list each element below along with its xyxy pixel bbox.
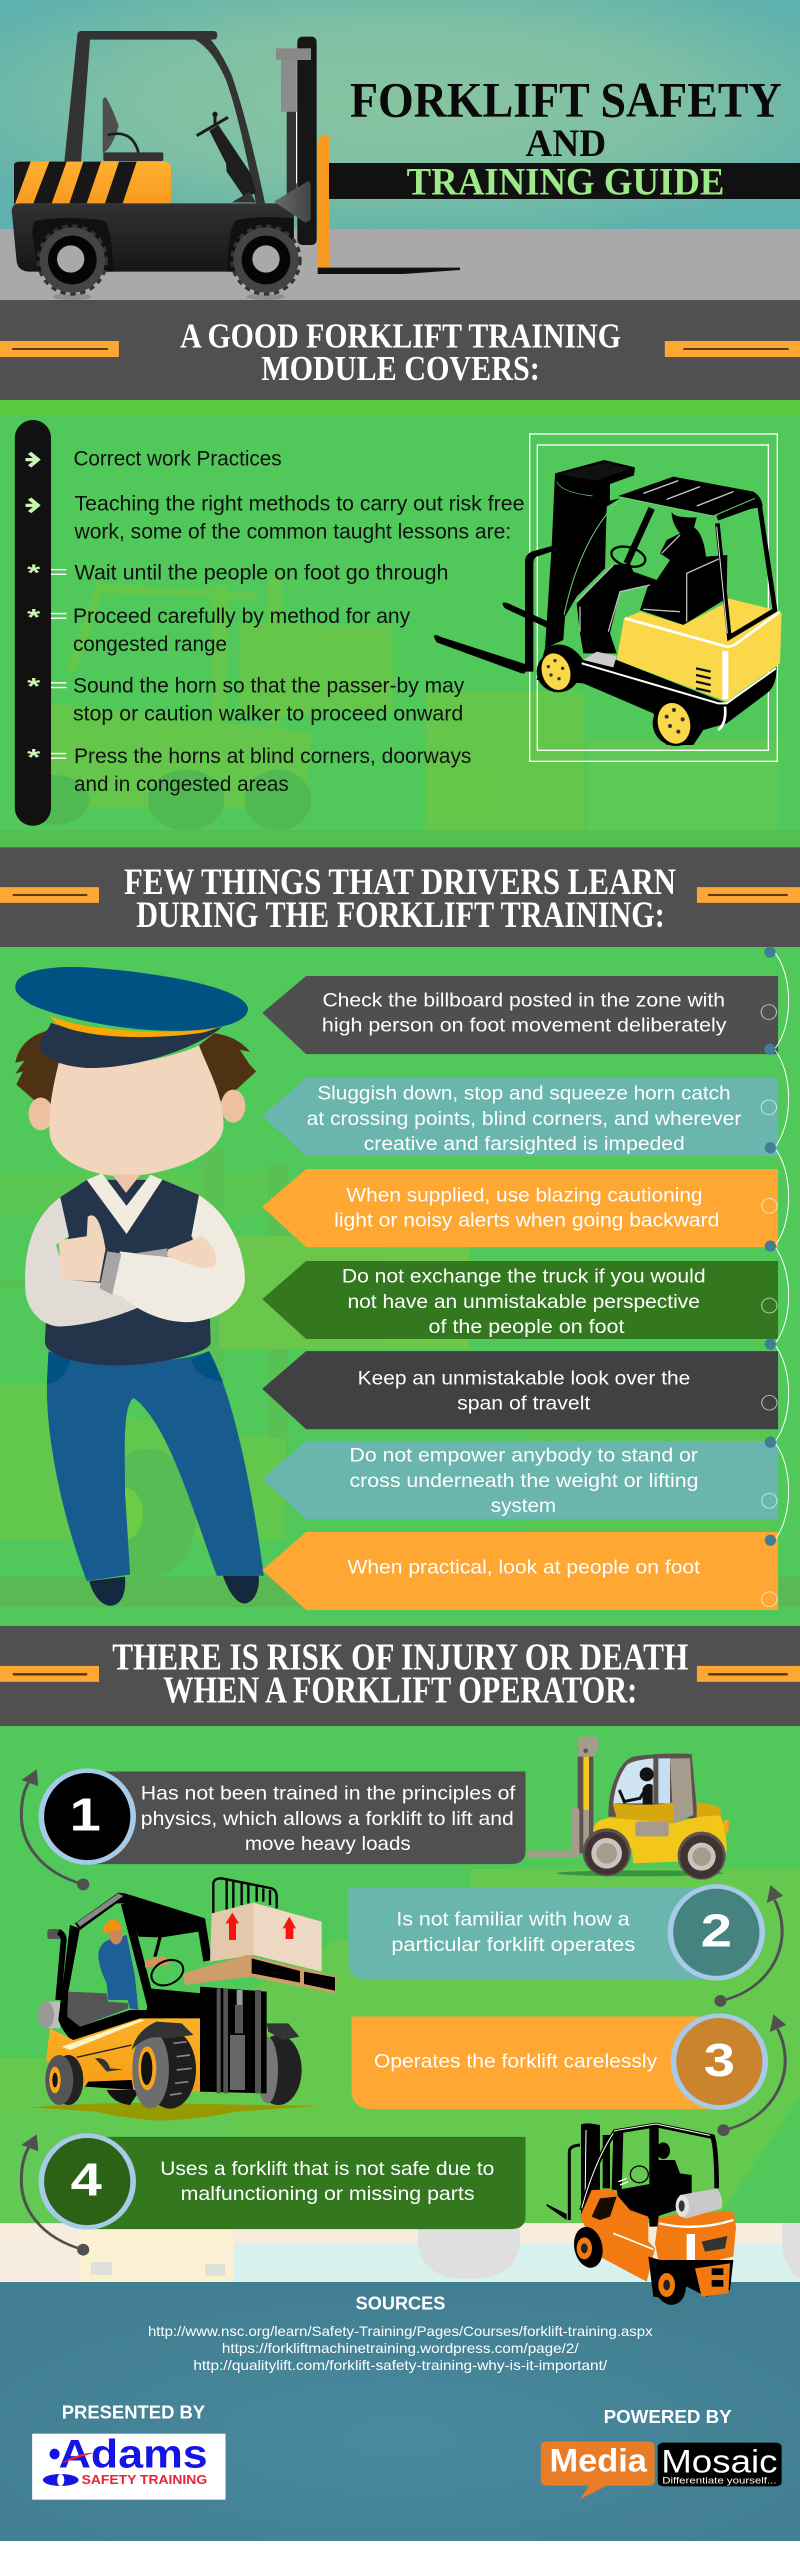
section 1 background xyxy=(0,400,800,847)
panel connector dots xyxy=(764,947,776,1546)
item 2: Is not familiar with how a xyxy=(396,1908,630,1930)
background truck watermark xyxy=(0,1149,800,1607)
sources: https://forkliftmachinetraining.wordpress.com/page/2/ xyxy=(222,2341,579,2356)
panel 4: of the people on foot xyxy=(429,1316,625,1338)
panel 2 xyxy=(262,1078,778,1156)
presented by: PRESENTED BY xyxy=(62,2403,205,2423)
item 2: particular forklift operates xyxy=(391,1934,635,1955)
panel 2: Sluggish down, stop and squeeze horn catch xyxy=(317,1083,731,1104)
panel 3: When supplied, use blazing cautioning xyxy=(346,1185,703,1206)
panel 6: Do not empower anybody to stand or xyxy=(349,1445,698,1466)
panel 4: not have an unmistakable perspective xyxy=(347,1291,700,1312)
panel 5: Keep an unmistakable look over the xyxy=(358,1368,690,1389)
panel 4 xyxy=(262,1261,778,1339)
arrow panels xyxy=(262,976,778,1610)
item 2: 2 xyxy=(701,1904,732,1957)
section 3 content xyxy=(0,1626,800,2256)
list text: Correct work Practices xyxy=(73,446,282,470)
orange forklift illustration xyxy=(547,2123,736,2308)
asterisk icons: * xyxy=(27,605,41,631)
title xyxy=(350,72,782,203)
footer xyxy=(0,2282,800,2541)
list text: congested range xyxy=(73,632,227,656)
item 4: malfunctioning or missing parts xyxy=(181,2183,474,2205)
sources xyxy=(148,2294,653,2373)
asterisk icons: * xyxy=(27,745,41,771)
asterisk icons: * xyxy=(27,674,41,700)
title: AND xyxy=(526,121,606,165)
yellow forklift illustration with frame xyxy=(434,434,782,761)
panel 3: light or noisy alerts when going backward xyxy=(334,1210,719,1231)
white image frame xyxy=(530,434,777,761)
item 3: 3 xyxy=(704,2034,735,2086)
item 4: 4 xyxy=(71,2153,102,2205)
header text and banner xyxy=(0,72,800,400)
item 1: move heavy loads xyxy=(245,1833,411,1854)
item 4 xyxy=(21,2134,526,2256)
panel 6: cross underneath the weight or lifting xyxy=(349,1470,698,1491)
arrow icons xyxy=(26,453,38,512)
panel 1: high person on foot movement deliberately xyxy=(322,1015,727,1036)
header background xyxy=(0,0,800,300)
panel 5: span of travelt xyxy=(457,1393,591,1414)
footer bottom white strip xyxy=(0,2541,800,2550)
panel 5 xyxy=(262,1351,778,1429)
panel 1: Check the billboard posted in the zone with xyxy=(322,990,725,1011)
section 2 background xyxy=(0,947,800,1626)
panel 3 xyxy=(262,1169,778,1247)
panel 7 xyxy=(262,1532,778,1610)
section banner 1: MODULE COVERS: xyxy=(261,348,540,388)
item 3: Operates the forklift carelessly xyxy=(374,2050,657,2072)
background forklift watermark xyxy=(18,575,778,830)
item 4: Uses a forklift that is not safe due to xyxy=(160,2158,494,2179)
list text: Wait until the people on foot go through xyxy=(74,560,448,584)
large forklift with cargo xyxy=(30,1878,337,2121)
forklift illustration: header xyxy=(12,31,460,300)
item 1: physics, which allows a forklift to lift and xyxy=(141,1808,514,1829)
panel connector arcs xyxy=(761,952,789,1607)
small yellow forklift xyxy=(528,1737,729,1880)
list text: Press the horns at blind corners, doorways xyxy=(74,743,471,768)
connector dashes xyxy=(51,569,66,759)
logo: Media Mosaic: Media xyxy=(549,2442,647,2479)
section banner 2 xyxy=(0,847,800,947)
list text xyxy=(73,446,524,796)
list text: stop or caution walker to proceed onward xyxy=(73,701,463,725)
list text: and in congested areas xyxy=(74,772,289,796)
background watermark xyxy=(0,1868,800,2223)
section banner 1 xyxy=(0,300,800,400)
panel 1 xyxy=(262,976,778,1054)
panel 6 xyxy=(262,1441,778,1519)
forklift wheels xyxy=(537,650,699,747)
logo: Adams Safety Training: SAFETY TRAINING xyxy=(82,2473,207,2487)
title bar xyxy=(329,163,800,199)
panel 6: system xyxy=(491,1496,556,1517)
list text: work, some of the common taught lessons are: xyxy=(74,519,511,543)
section banner 3 xyxy=(0,1626,800,1726)
panel 2: at crossing points, blind corners, and wherever xyxy=(307,1108,741,1129)
panel 7: When practical, look at people on foot xyxy=(347,1557,700,1578)
list text: Proceed carefully by method for any xyxy=(73,603,411,628)
section 2 content xyxy=(0,947,800,1610)
sources: http://qualitylift.com/forklift-safety-training-why-is-it-important/ xyxy=(193,2358,608,2373)
list text: Sound the horn so that the passer-by may xyxy=(73,673,465,697)
man illustration xyxy=(15,967,264,1606)
logo: Adams Safety Training: Adams xyxy=(59,2431,208,2476)
item 1: Has not been trained in the principles of xyxy=(141,1783,515,1804)
wheel right xyxy=(232,226,300,294)
sources: SOURCES xyxy=(356,2294,445,2314)
logo: Adams Safety Training xyxy=(32,2431,226,2500)
item 1 xyxy=(21,1769,526,1890)
panel 2: creative and farsighted is impeded xyxy=(364,1133,685,1155)
asterisk icons xyxy=(27,560,41,771)
item 2 xyxy=(348,1885,783,2007)
logo: Media Mosaic: Differentiate yourself... xyxy=(662,2476,777,2486)
wheel left xyxy=(38,226,106,294)
item 1: 1 xyxy=(70,1788,101,1840)
section 1 content xyxy=(15,420,778,830)
section 3 pale band xyxy=(0,2223,800,2282)
black timeline pill xyxy=(15,420,51,826)
item 3 xyxy=(352,2014,786,2136)
logo: Media Mosaic xyxy=(541,2441,782,2499)
asterisk icons: * xyxy=(27,560,41,586)
list text: Teaching the right methods to carry out risk free xyxy=(74,491,524,515)
section 3 background xyxy=(0,1726,800,2223)
orange carriage and fork xyxy=(318,135,460,274)
panel 4: Do not exchange the truck if you would xyxy=(342,1266,706,1287)
powered by: POWERED BY xyxy=(604,2408,732,2428)
